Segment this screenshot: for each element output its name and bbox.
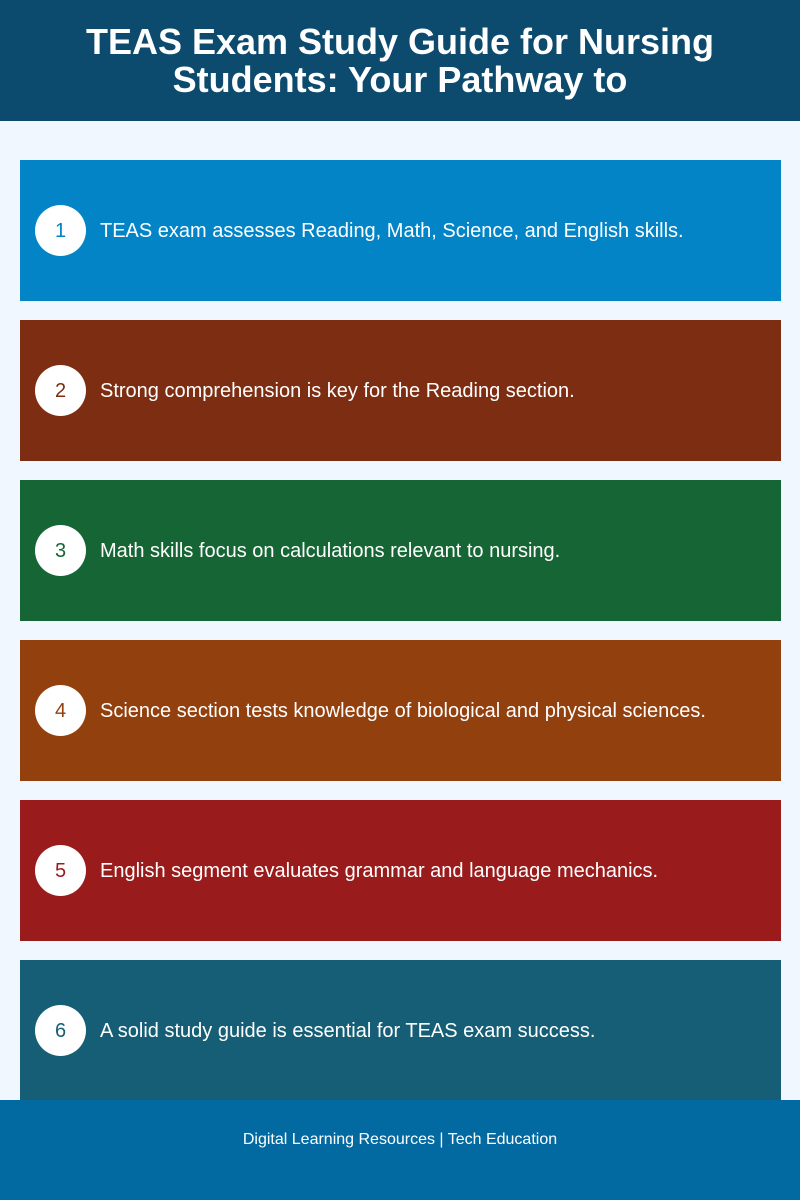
- card 6: 6: [55, 1020, 66, 1042]
- card 5: English segment evaluates grammar and language mechanics.: [100, 860, 658, 882]
- card 1: 1: [55, 220, 66, 242]
- card 2: 2: [55, 380, 66, 402]
- card 3: [20, 480, 781, 621]
- card 4: Science section tests knowledge of biological and physical sciences.: [100, 700, 706, 722]
- card 3: Math skills focus on calculations relevant to nursing.: [100, 540, 560, 562]
- title: TEAS Exam Study Guide for Nursing: [86, 21, 714, 62]
- card 4: 4: [55, 700, 66, 722]
- title: Students: Your Pathway to: [173, 59, 627, 100]
- card 5: [20, 800, 781, 941]
- footer: [0, 1100, 800, 1200]
- card 6: A solid study guide is essential for TEAS exam success.: [100, 1020, 595, 1042]
- card 2: Strong comprehension is key for the Reading section.: [100, 380, 575, 402]
- card 4: [20, 640, 781, 781]
- footer: Digital Learning Resources | Tech Education: [243, 1131, 557, 1148]
- card 1: TEAS exam assesses Reading, Math, Science, and English skills.: [100, 220, 684, 242]
- card 3: 3: [55, 540, 66, 562]
- card 1: [20, 160, 781, 301]
- card 5: 5: [55, 860, 66, 882]
- card 6: [20, 960, 781, 1101]
- title: [0, 0, 800, 121]
- card 2: [20, 320, 781, 461]
